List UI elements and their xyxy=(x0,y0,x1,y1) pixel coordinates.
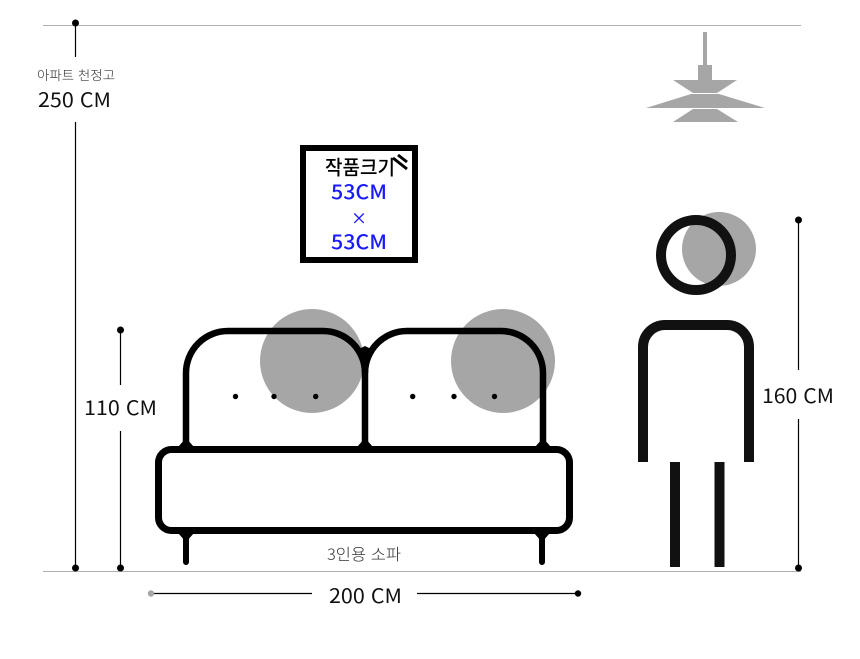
artwork frame: × xyxy=(351,205,367,229)
tufting dots xyxy=(233,394,497,399)
cushion circles xyxy=(260,309,555,413)
artwork frame: 53CM xyxy=(331,176,387,205)
legs xyxy=(670,462,724,567)
pendant lamp xyxy=(646,32,765,122)
width measure: 200 CM xyxy=(329,580,402,609)
artwork frame xyxy=(303,148,415,260)
sofa height measure: 110 CM xyxy=(84,392,157,421)
person height measure xyxy=(762,216,834,572)
sofa height measure xyxy=(84,326,157,572)
ceiling height measure: 아파트 천정고 xyxy=(37,65,115,84)
head shadow circle xyxy=(682,212,756,286)
width measure xyxy=(148,580,581,609)
person xyxy=(643,212,756,567)
ceiling height measure xyxy=(37,20,115,572)
ceiling height measure: 250 CM xyxy=(38,84,111,113)
artwork frame: 작품크기 xyxy=(325,152,395,180)
joint marks xyxy=(178,346,551,542)
head ring xyxy=(661,220,731,290)
sofa seat xyxy=(158,450,570,530)
person height measure: 160 CM xyxy=(762,380,834,409)
sofa legs xyxy=(186,534,542,562)
sofa label: 3인용 소파 xyxy=(327,541,401,565)
artwork frame: 53CM xyxy=(331,226,387,255)
sofa xyxy=(158,309,570,562)
torso xyxy=(643,325,749,462)
sofa backrest xyxy=(186,331,543,449)
